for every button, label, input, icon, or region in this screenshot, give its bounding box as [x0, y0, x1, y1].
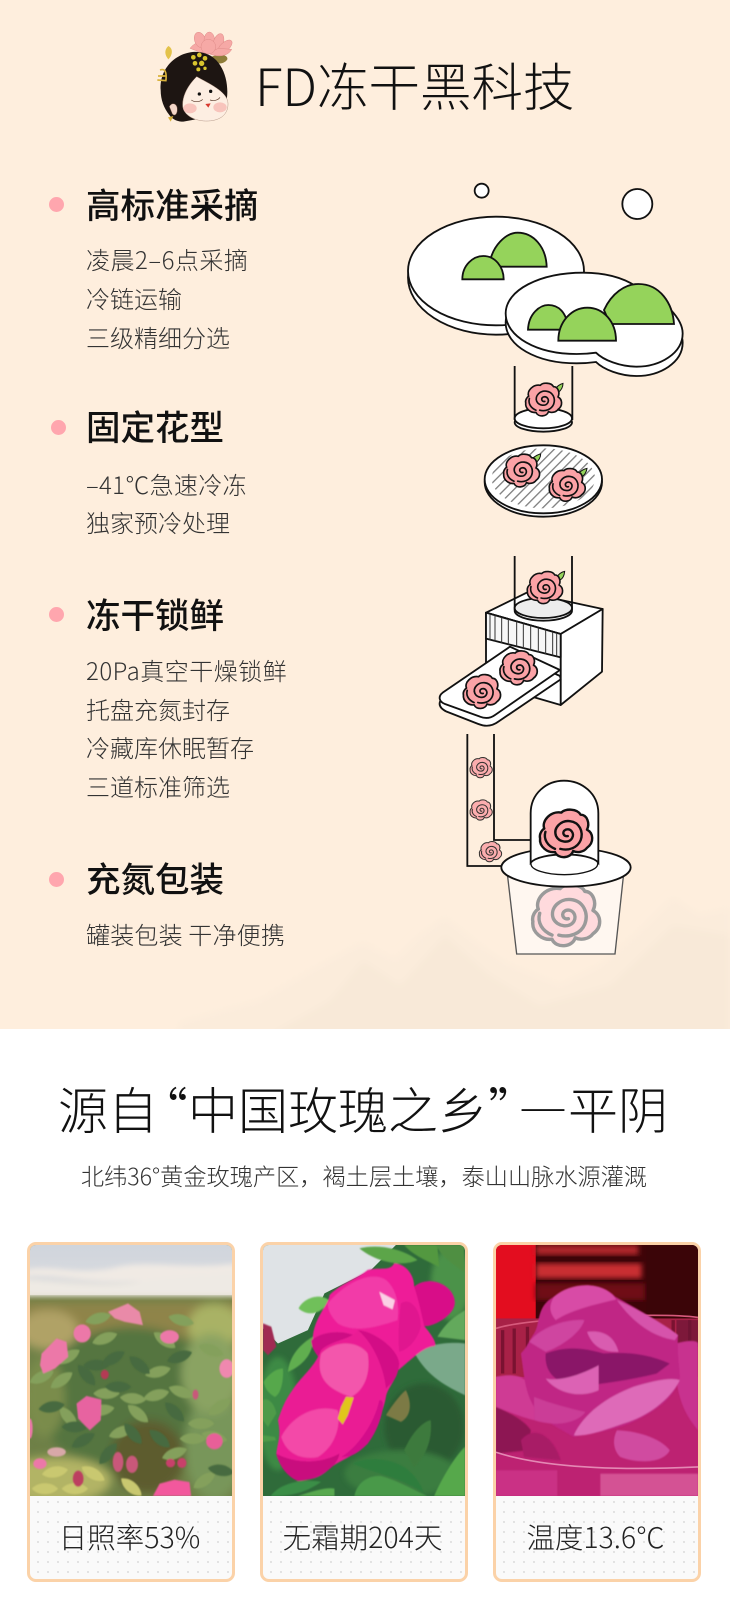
pull-out tray with roses	[440, 647, 561, 726]
heading: 固定花型	[86, 400, 224, 450]
jar with ghost rose	[501, 848, 631, 954]
photo: dried rose in glass	[496, 1245, 698, 1496]
heading: 冻干锁鲜	[86, 588, 224, 638]
tube with rose on gray dish	[515, 556, 572, 621]
subheading: origin description: 北纬36°黄金玫瑰产区，褐土层土壤，泰山山脉水源灌溉	[81, 1158, 647, 1192]
section: 冻干锁鲜	[49, 588, 287, 803]
bullet	[49, 197, 64, 212]
L-shaped chute with small roses	[467, 734, 532, 866]
illustration: freeze-dry process	[407, 182, 684, 955]
text line: –41℃急速冷冻	[86, 466, 247, 501]
bullet	[49, 872, 64, 887]
text line: 托盘充氮封存	[86, 691, 230, 726]
text line: 三级精细分选	[86, 319, 230, 354]
bubbles	[475, 184, 652, 219]
text line: 罐装包装 干净便携	[86, 916, 285, 951]
heading: origin: 源自“中国玫瑰之乡”—平阴	[58, 1072, 668, 1144]
front plate	[506, 273, 683, 376]
tube with rose on dish	[515, 366, 572, 432]
bullet	[49, 607, 64, 622]
background mountains	[0, 880, 730, 1029]
section: 充氮包装	[49, 852, 285, 951]
upper section in 3x zoom coordinates	[408, 184, 683, 517]
text line: 凌晨2–6点采摘	[86, 241, 248, 276]
hatched plate with two roses	[483, 443, 603, 517]
freeze-dry box	[486, 593, 603, 705]
card: sunshine	[27, 1242, 235, 1582]
back plate	[408, 217, 584, 335]
lower section in 3x zoom coordinates	[440, 556, 631, 954]
text line: 三道标准筛选	[86, 768, 230, 803]
section: 固定花型	[51, 400, 247, 539]
photo: magenta roses	[263, 1245, 465, 1496]
heading: 充氮包装	[86, 852, 224, 902]
text line: 冷链运输	[86, 280, 182, 315]
photo: rose bush	[30, 1245, 232, 1496]
glass dome with rose	[531, 781, 598, 875]
caption: 日照率53%	[59, 1516, 200, 1557]
title: FD冻干黑科技	[255, 46, 575, 121]
section: 高标准采摘	[49, 178, 258, 354]
icon: mascot head with lotus	[157, 32, 232, 122]
heading: 高标准采摘	[86, 178, 258, 228]
card: temperature	[493, 1242, 701, 1582]
text line: 冷藏库休眠暂存	[86, 729, 254, 764]
caption: 温度13.6℃	[526, 1516, 665, 1557]
text line: 独家预冷处理	[86, 504, 230, 539]
card: frost-free period	[260, 1242, 468, 1582]
bullet	[51, 420, 66, 435]
caption: 无霜期204天	[283, 1516, 442, 1557]
text line: 20Pa真空干燥锁鲜	[86, 652, 287, 687]
